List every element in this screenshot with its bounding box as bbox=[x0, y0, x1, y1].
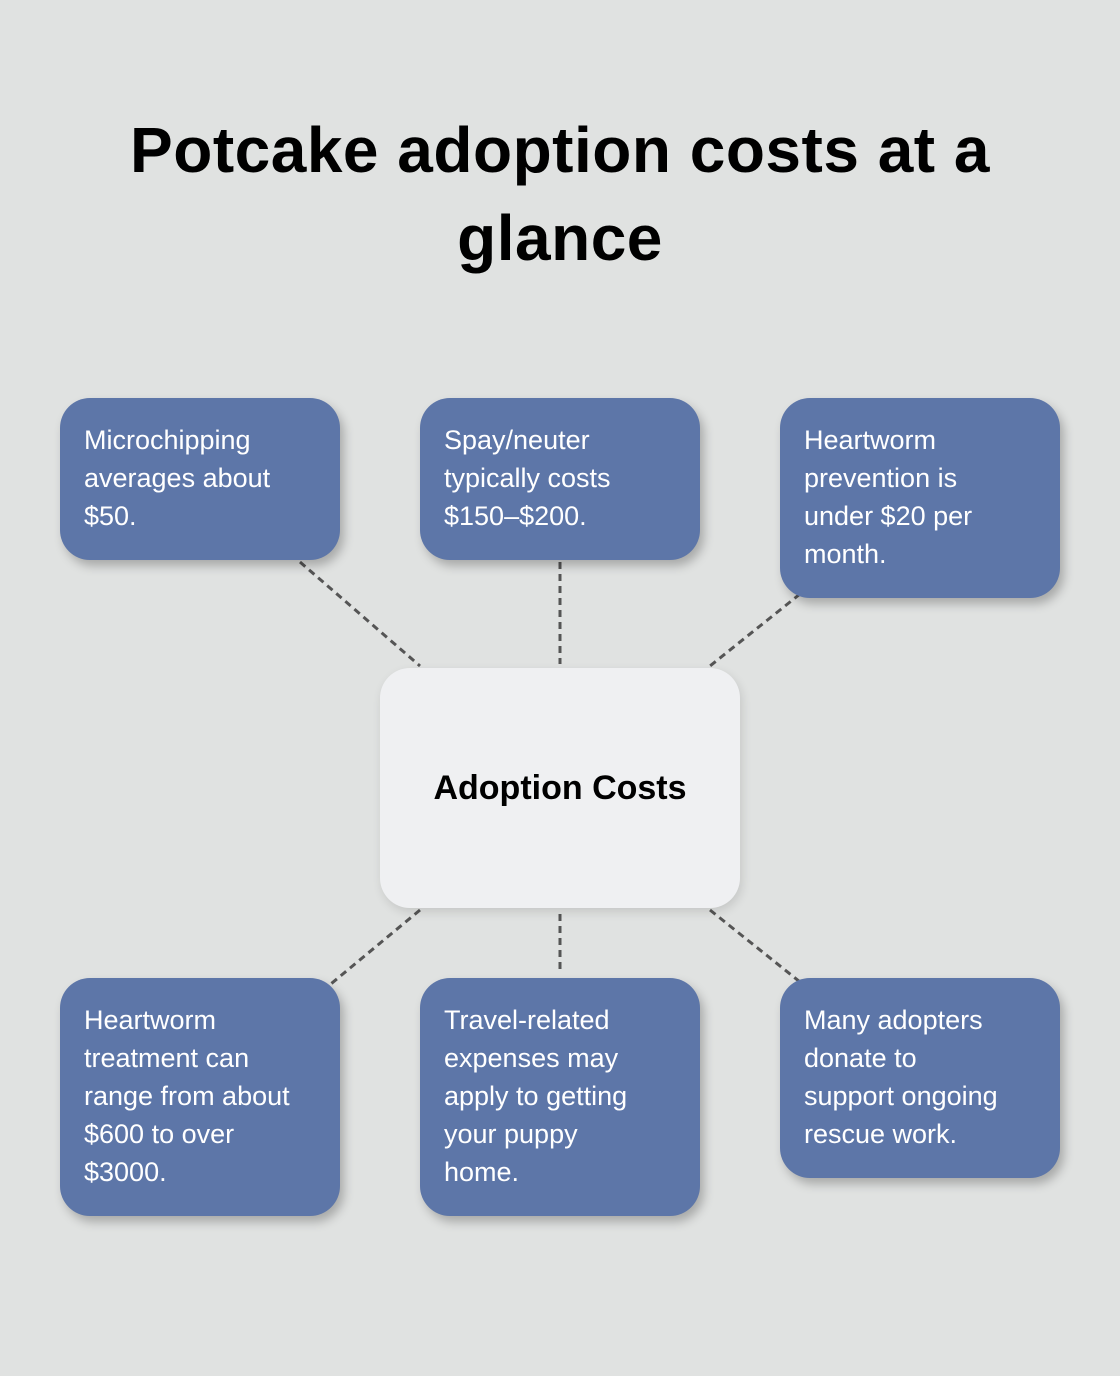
box: heartworm prevention: prevention is bbox=[804, 463, 957, 493]
title: Potcake adoption costs at a bbox=[130, 114, 990, 186]
box: heartworm treatment bbox=[60, 978, 340, 1216]
box: donations: donate to bbox=[804, 1043, 917, 1073]
box: spay/neuter bbox=[420, 398, 700, 560]
title bbox=[130, 114, 990, 274]
box: donations: Many adopters bbox=[804, 1005, 983, 1035]
box: spay/neuter: $150–$200. bbox=[444, 501, 587, 531]
box: donations: rescue work. bbox=[804, 1119, 957, 1149]
box: donations bbox=[780, 978, 1060, 1178]
box: spay/neuter: Spay/neuter bbox=[444, 425, 590, 455]
box: heartworm treatment: range from about bbox=[84, 1081, 290, 1111]
box: heartworm treatment: Heartworm bbox=[84, 1005, 216, 1035]
box: spay/neuter: typically costs bbox=[444, 463, 611, 493]
box: travel: home. bbox=[444, 1157, 519, 1187]
box: donations: support ongoing bbox=[804, 1081, 998, 1111]
box: travel: expenses may bbox=[444, 1043, 618, 1073]
box: microchipping: $50. bbox=[84, 501, 137, 531]
box: heartworm prevention: under $20 per bbox=[804, 501, 972, 531]
box: heartworm treatment: treatment can bbox=[84, 1043, 249, 1073]
box: heartworm prevention: month. bbox=[804, 539, 887, 569]
box: travel: your puppy bbox=[444, 1119, 578, 1149]
center node: Adoption Costs bbox=[433, 768, 687, 806]
center node bbox=[380, 668, 740, 908]
box: microchipping: averages about bbox=[84, 463, 270, 493]
box: travel: apply to getting bbox=[444, 1081, 627, 1111]
title: glance bbox=[457, 202, 663, 274]
box: microchipping bbox=[60, 398, 340, 560]
box: heartworm prevention: Heartworm bbox=[804, 425, 936, 455]
box: microchipping: Microchipping bbox=[84, 425, 251, 455]
box: heartworm prevention bbox=[780, 398, 1060, 598]
box: travel bbox=[420, 978, 700, 1216]
box: heartworm treatment: $3000. bbox=[84, 1157, 167, 1187]
box: travel: Travel-related bbox=[444, 1005, 610, 1035]
box: heartworm treatment: $600 to over bbox=[84, 1119, 234, 1149]
